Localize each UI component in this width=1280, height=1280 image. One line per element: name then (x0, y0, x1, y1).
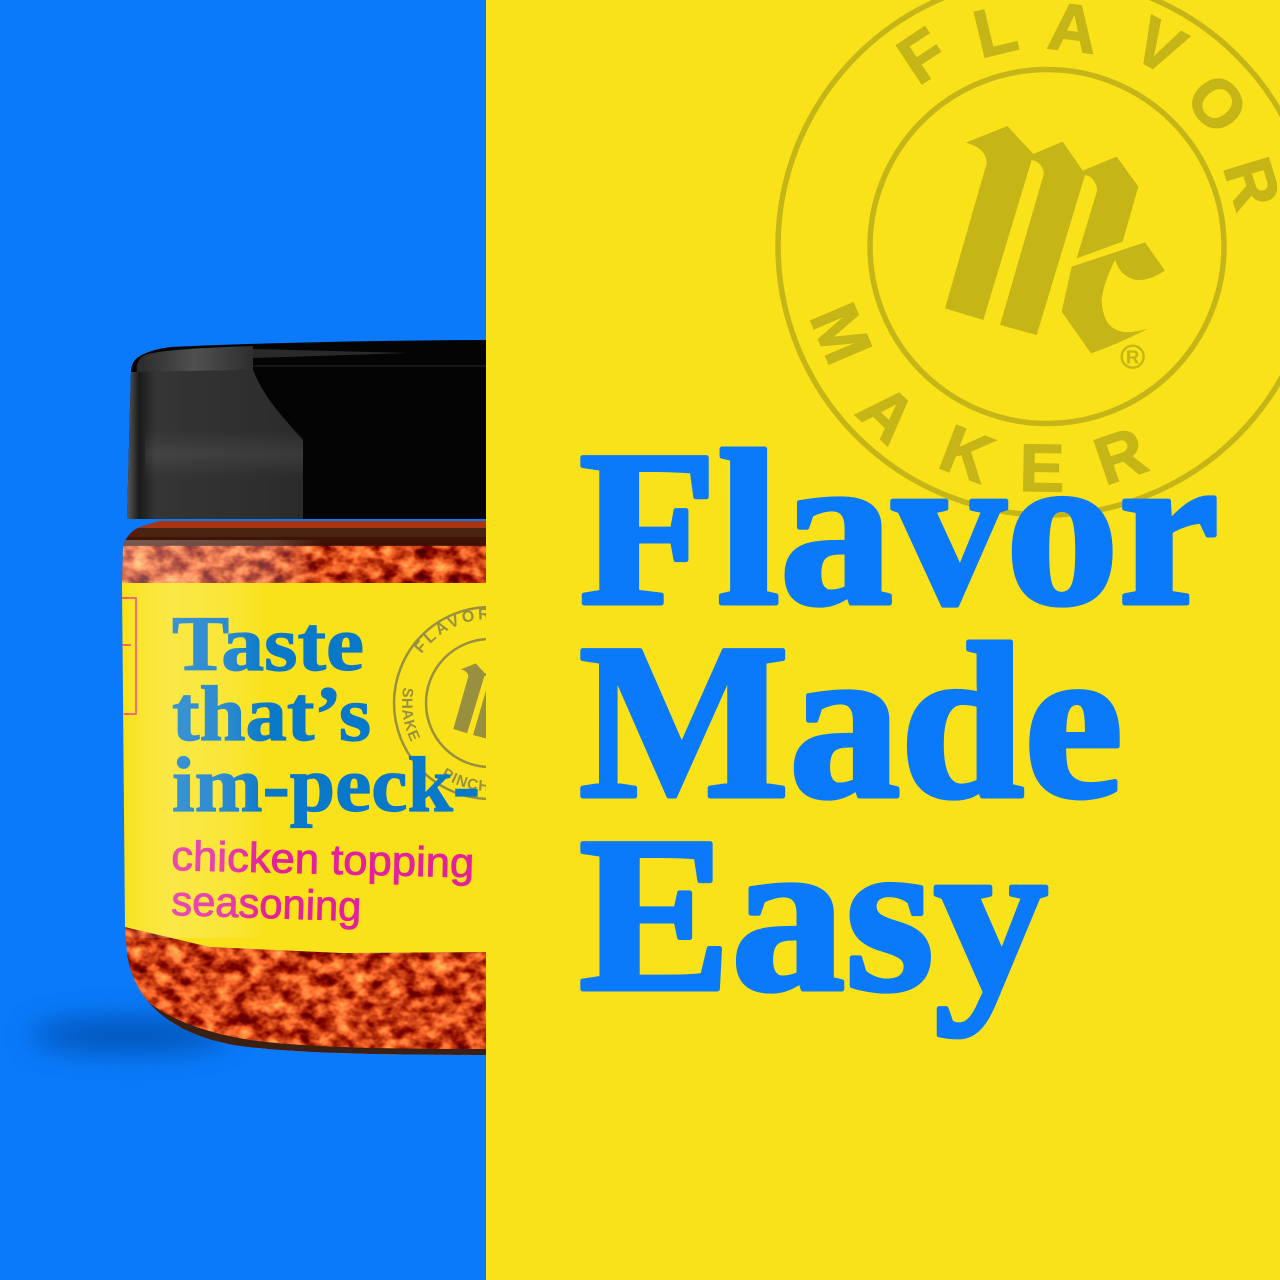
label shine highlight (128, 583, 268, 938)
Flavor Maker badge watermark: F (885, 14, 961, 99)
label headline: Taste that's im-peck- (172, 600, 480, 828)
Flavor Maker badge watermark: R (1085, 413, 1156, 500)
headline: Flavor Made Easy: Easy (579, 792, 1048, 1038)
Flavor Maker badge watermark: O (1171, 60, 1262, 148)
Flavor Maker badge watermark: K (930, 411, 1002, 498)
label subtitle: chicken topping seasoning (171, 832, 475, 930)
small badge on label: PINCH (443, 768, 486, 791)
headline: Flavor Made Easy: Flavor (579, 406, 1219, 652)
label headline: Taste that's im-peck-: Taste (172, 600, 364, 687)
small badge on label (392, 606, 486, 800)
Flavor Maker badge watermark: E (1019, 431, 1065, 506)
label headline: Taste that's im-peck-: im-peck- (172, 741, 480, 828)
jar glass top with seasoning (122, 520, 486, 584)
pink label tab (122, 598, 136, 714)
jar cap (127, 340, 486, 519)
yellow background panel (486, 0, 1280, 1280)
label subtitle: chicken topping seasoning: chicken topping (171, 832, 475, 886)
headline: Flavor Made Easy (579, 406, 1219, 1038)
Flavor Maker badge watermark: R (1126, 346, 1140, 367)
jar bottom with seasoning flakes (120, 925, 490, 1060)
Flavor Maker badge watermark (778, 0, 1280, 515)
jar label (122, 583, 486, 953)
label subtitle: chicken topping seasoning: seasoning (171, 877, 362, 930)
headline: Flavor Made Easy: Made (579, 599, 1123, 845)
small badge on label: SHAKE (402, 688, 420, 742)
small badge on label: FLAVOR (414, 608, 486, 653)
Flavor Maker badge watermark: A (844, 370, 930, 458)
blue background panel (0, 0, 486, 1280)
Flavor Maker badge watermark: V (1122, 3, 1197, 90)
jar shadow (30, 1018, 230, 1052)
seasoning jar (25, 340, 486, 1068)
Flavor Maker badge watermark: M (795, 293, 886, 374)
label headline: Taste that's im-peck-: that’s (172, 670, 371, 757)
